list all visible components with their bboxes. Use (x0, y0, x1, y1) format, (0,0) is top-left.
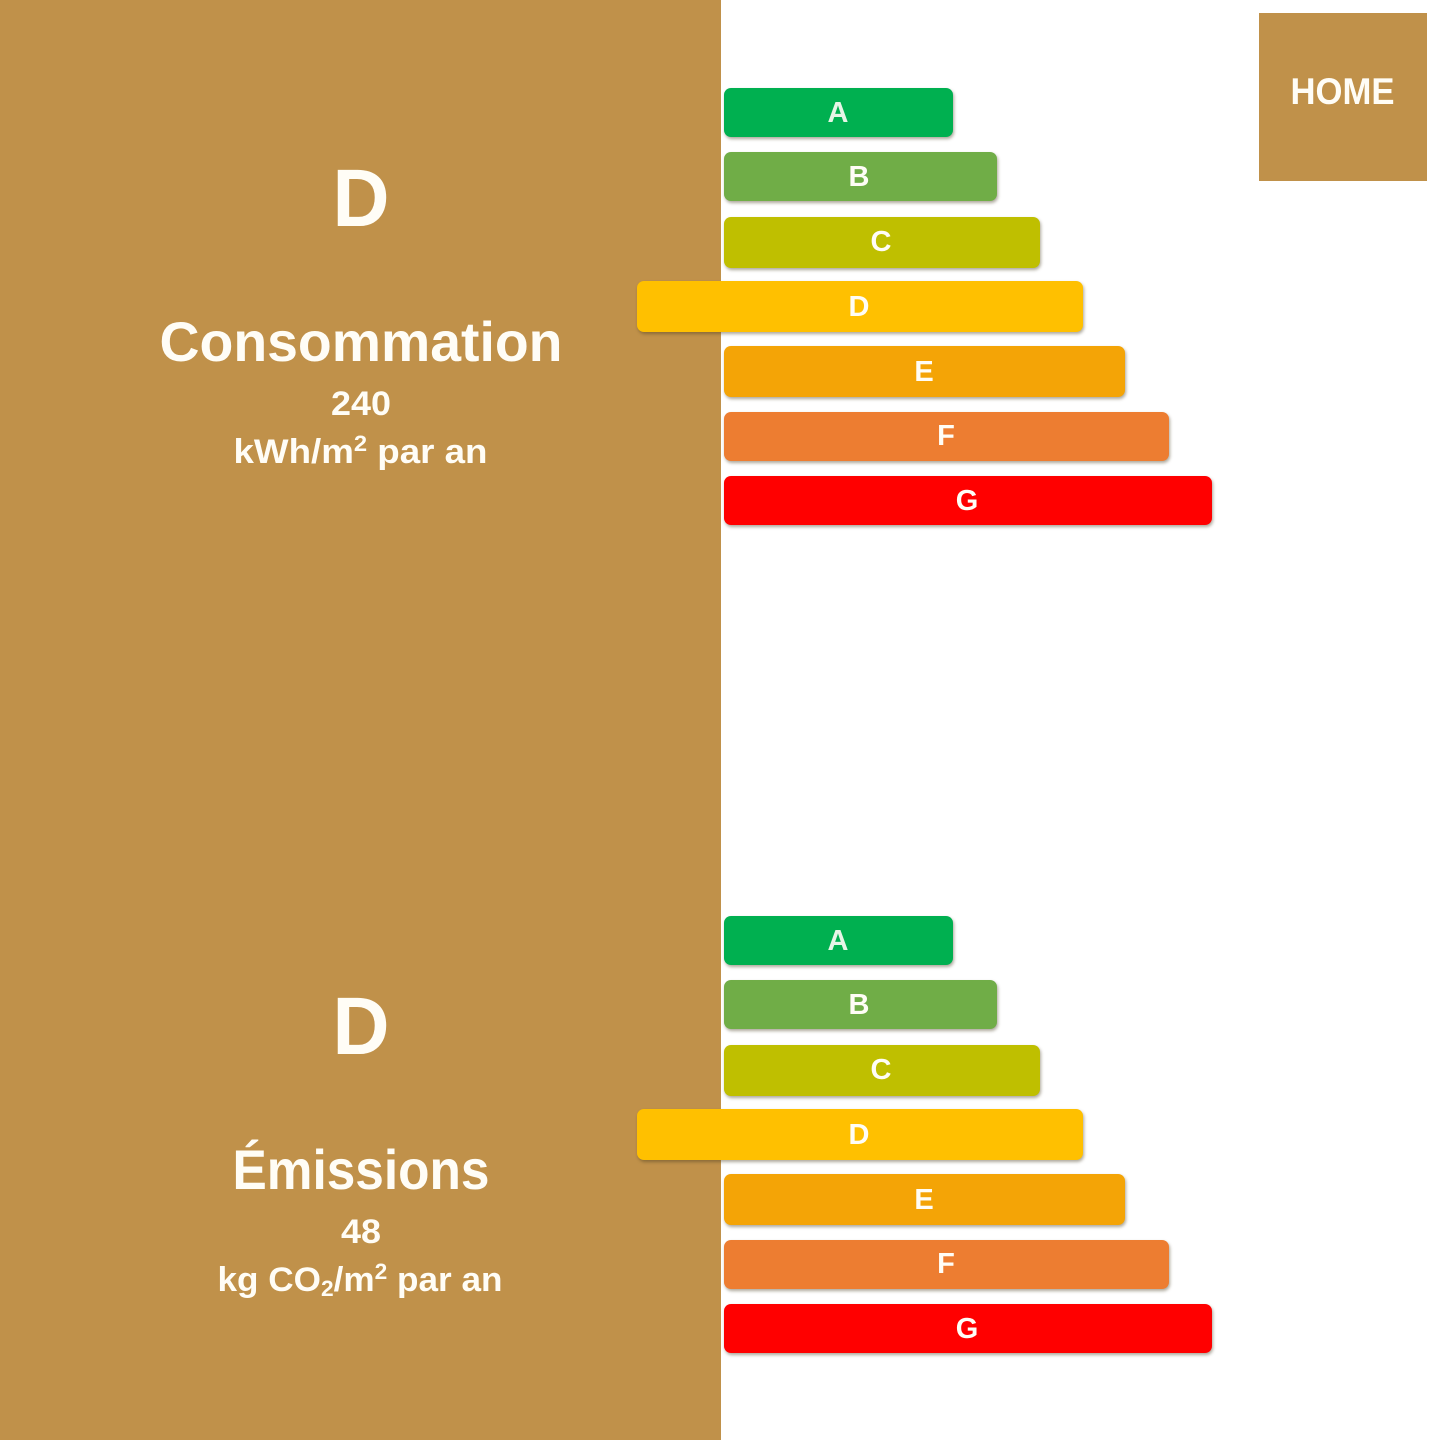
heading: Consommation: Consommation (160, 310, 562, 373)
bar B (724, 980, 997, 1029)
unit: kWh/m² par an: kWh/m (234, 433, 345, 471)
rating letter: emissions D: D (332, 981, 390, 1072)
bar D (selected): D (849, 291, 869, 323)
bar E: E (914, 356, 934, 388)
unit: kg CO₂/m² par an: /m (334, 1261, 375, 1299)
bar B (724, 152, 997, 201)
value: 240: 240 (331, 385, 391, 423)
bar C: C (871, 1054, 892, 1086)
rating letter: consumption D: D (332, 153, 390, 244)
bar A: A (828, 925, 849, 957)
chart: consumption energy scale (637, 88, 1212, 525)
button: HOME: HOME (1290, 71, 1394, 112)
panel: emissions summary (218, 981, 502, 1301)
bar F: F (937, 1248, 955, 1280)
bar F (724, 1240, 1169, 1289)
unit: kg CO₂/m² par an: par an (387, 1261, 502, 1299)
bar A (724, 916, 953, 965)
heading: Émissions: Émissions (232, 1138, 490, 1201)
bar D (selected) (637, 1109, 1083, 1160)
unit: kg CO₂/m² par an: 2 (321, 1276, 334, 1301)
bar B: B (849, 161, 869, 193)
bar C: C (871, 226, 892, 258)
button: HOME (1259, 13, 1427, 181)
unit: kg CO₂/m² par an: 2 (375, 1259, 387, 1284)
bar B: B (849, 989, 869, 1021)
chart: emissions scale (637, 916, 1212, 1353)
bar F: F (937, 420, 955, 452)
bar E (724, 1174, 1125, 1225)
bar E (724, 346, 1125, 397)
value: 48: 48 (341, 1213, 381, 1251)
bar D (selected): D (849, 1119, 869, 1151)
bar G: G (956, 1313, 978, 1345)
bar G (724, 476, 1212, 525)
panel: consumption summary (160, 153, 562, 471)
bar G: G (956, 485, 978, 517)
bar G (724, 1304, 1212, 1353)
bar E: E (914, 1184, 934, 1216)
bar F (724, 412, 1169, 461)
unit: kg CO₂/m² par an: kg CO (218, 1261, 318, 1299)
bar C (724, 217, 1040, 268)
bar C (724, 1045, 1040, 1096)
panel: left brown background (0, 0, 721, 1440)
unit: kWh/m² par an: par an (367, 433, 488, 471)
bar A (724, 88, 953, 137)
bar A: A (828, 97, 849, 129)
bar D (selected) (637, 281, 1083, 332)
unit: kWh/m² par an: 2 (354, 431, 367, 456)
